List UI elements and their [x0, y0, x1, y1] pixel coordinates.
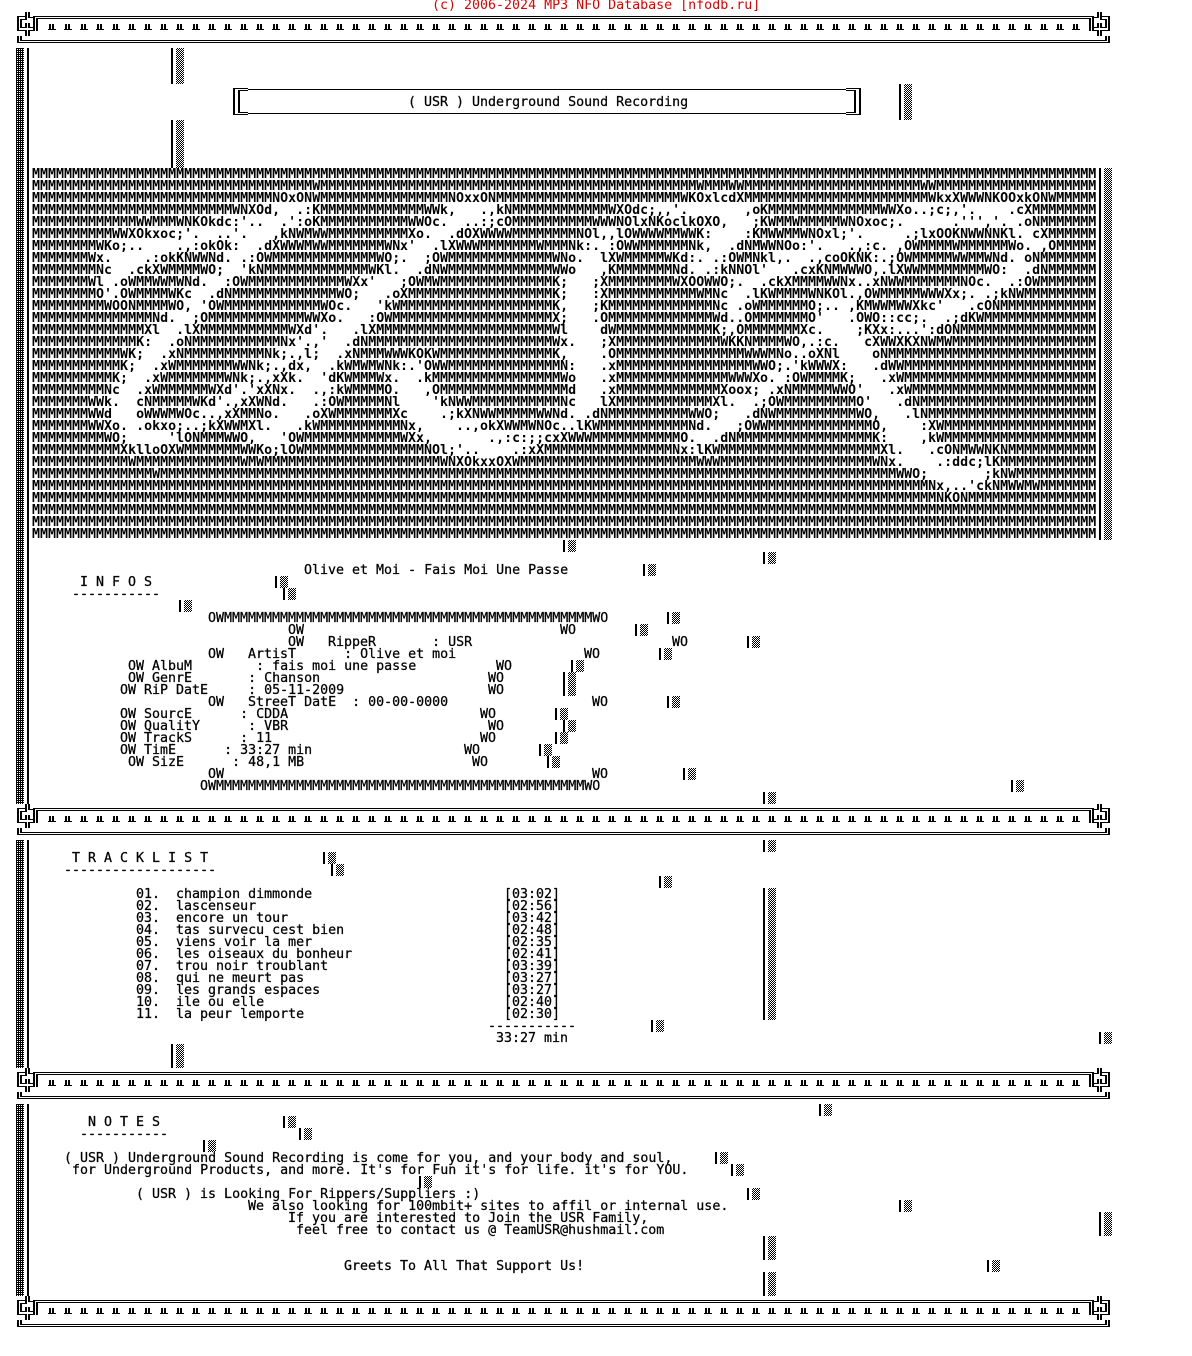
- infos panel: WO: [488, 719, 504, 734]
- infos panel: [120, 611, 688, 794]
- art column: left: MMMMMMMMMMMMMMMMMMMMMMMMMMMMMMMMMMMMMMMMMMMMMM MMMMMMMMMMMMMMMMMMMMMMMMMMMMMMMMMMMWMMMMMMMMMM MMMMMMMMMMMMMMMMMMMMMMMMMMMMMMNOxONWMMMMMMMMMM MMMMMMMMMMMMMMMMMMMMMMMMMWNXOd, .:KMMMMMMMMMM MMMMMMMMMMMMMWWMMMWNKOkdc:'.. .':oKMMMMMMMMMM MMMMMMMMMMWWXOkxoc;'. ..'. ,kNWMWWMMMMMMMMM MMMMMMMMWKo;.. .,:okOk: .dXWWWMWWMMMMMMMWN MMMMMMMWx. .:okKNWWNd. .:OWMMMMMMMMMMMMMWO; MMMMMMMMNc .ckXWMMMMWO; 'kNMMMMMMMMMMMMMWKl. MMMMMMMWl .oWMMWWMWNd. :OWMMMMMMMMMMMMWXx' MMMMMMMMO'.OWMMMMWKc .dNMMMMMMMMMMMMMWO; .o MMMMMMMMMWOONMMMMWO, 'OWMMMMMMMMMMMMWOc. 'kW MMMMMMMMMMMMMMMNd. ;OMMMMMMMMMMMMWWXo. :OWM MMMMMMMMMMMMMMXl .lXMMMMMMMMMMMWXd'. .lXMMM MMMMMMMMMMMMMK: .oNMMMMMMMMMMMNx'.,' .dNMMMM MMMMMMMMMMMWK; .xNMMMMMMMMMMNk;.,l; .xNMMMWW MMMMMMMMMMMK; .xWMMMMMMMWWNk;.,dx, .kWMWMWNk MMMMMMMMMMK; .xWMMMMMMMWNk;.,xXk. 'dKWMMMWx. MMMMMMMMMNc .xWMMMMMMWXd'.'xXNx. .,:kWMMMMO. MMMMMMMWWk. cNMMMMMWKd'.,xXWNd. .:OWMMMMMNl MMMMMMMWWd oWWWMWOc..,xXMMNo. .oXWMMMMMMMX MMMMMMMWWXo. .okxo;..;kXWWMXl. .kWMMMMMMMMMM MMMMMMMMMWO; 'lONMMMWWO, 'OWMMMMMMMMMMMM MMMMMMMMMMMXklloOXWMMMMMMMWWKo;lOWMMMMMMMMMMMM MMMMMMMMMMMMWMMMMMMMMMMMMMWMWMMMMMMMMMMMMMMMMM MMMMMMMMMMMMMMMWMMMMMMMMMMMMMMMMMMMMMMMMMMMMMM MMMMMMMMMMMMMMMMMMMMMMMMMMMMMMMMMMMMMMMMMMMMMM MMMMMMMMMMMMMMMMMMMMMMMMMMMMMMMMMMMMMMMMMMMMMM MMMMMMMMMMMMMMMMMMMMMMMMMMMMMMMMMMMMMMMMMMMMMM MMMMMMMMMMMMMMMMMMMMMMMMMMMMMMMMMMMMMMMMMMMMMM MMMMMMMMMMMMMMMMMMMMMMMMMMMMMMMMMMMMMMMMMMMMMM: [32, 167, 400, 542]
- infos panel: OWMMMMMMMMMMMMMMMMMMMMMMMMMMMMMMMMMMMMMMMMMMMMMMWO: [208, 611, 608, 626]
- track numbers and titles: 01. champion dimmonde 02. lascenseur 03. encore un tour 04. tas survecu cest bien 05. viens voir la mer 06. les oiseaux du bonheur 07. trou noir troublant 08. qui ne meurt pas 09. les grands espaces 10. ile ou elle 11. la peur lemporte: [136, 887, 352, 1022]
- info row: size: OW SizE : 48,1 MB: [128, 755, 304, 770]
- infos panel: WO: [592, 767, 608, 782]
- infos panel: WO: [480, 731, 496, 746]
- ornamental border: above tracklist: [17, 804, 1110, 835]
- shade bars: tracklist section: [171, 840, 1112, 1068]
- infos panel: WO: [592, 695, 608, 710]
- infos panel: WO: [672, 635, 688, 650]
- info row: rip date: OW RiP DatE : 05-11-2009: [120, 683, 344, 698]
- right shade bar beside the art: [1096, 168, 1112, 540]
- album heading: Olive et Moi - Fais Moi Une Passe: [304, 563, 568, 578]
- greetings line: Greets To All That Support Us!: [344, 1259, 584, 1274]
- infos panel: WO: [560, 623, 576, 638]
- top ornamental border: [17, 12, 1110, 43]
- notes underline: -----------: [80, 1127, 168, 1142]
- infos panel: WO: [480, 707, 496, 722]
- notes text block: for Underground Products, and more. It's for Fun it's for life. it's for YOU.: [72, 1163, 688, 1178]
- left edge strip: tracklist section: [16, 840, 30, 1068]
- infos panel: OWMMMMMMMMMMMMMMMMMMMMMMMMMMMMMMMMMMMMMMMMMMMMMMWO: [200, 779, 600, 794]
- ornamental border: bottom: [17, 1296, 1110, 1327]
- info row: tracks: OW TrackS : 11: [120, 731, 272, 746]
- info row: ripper: OW RippeR : USR: [288, 635, 472, 650]
- infos panel: WO: [496, 659, 512, 674]
- tracklist underline: -------------------: [64, 863, 216, 878]
- notes text block: We also looking for 100mbit+ sites to affil or internal use.: [248, 1199, 728, 1214]
- infos panel: OW: [288, 623, 304, 638]
- info row: genre: OW GenrE : Chanson: [128, 671, 320, 686]
- infos heading: I N F O S: [80, 575, 152, 590]
- total rule: -----------: [488, 1019, 576, 1034]
- title text: ( USR ) Underground Sound Recording: [408, 95, 688, 110]
- shade bars: infos section: [179, 540, 1024, 804]
- infos panel: WO: [584, 647, 600, 662]
- tracklist heading: T R A C K L I S T: [72, 851, 208, 866]
- info row: quality: OW QualitY : VBR: [120, 719, 288, 734]
- notes heading: N O T E S: [88, 1115, 160, 1130]
- ascii art panel: faces built from characters: [32, 167, 1096, 542]
- shade bars around the title: [171, 48, 912, 168]
- infos panel: WO: [488, 671, 504, 686]
- notes text block: [64, 1151, 728, 1274]
- infos underline: -----------: [72, 587, 160, 602]
- infos panel: WO: [488, 683, 504, 698]
- art column: centre: MMMMMMMMMMMMMMMMMMMMMMMMMMMMMMMMMMMMMMMMMMMMM MMMMMMMMMMMMMMMMMMMMMMMMMMMMMMMMMMMMMWMMMWWMM MMMMMMNOxxONMMMMMMMMMMMMMMMMMMMMMMMWKOxlcdXMM MMMWWk, .,kNMMMMMMMMMMMMWXOdc;,,'. ,o MWWOc. ..:;cOMMMMMMMMMMWWWNOlxNKoclkOXO, ; MXo. .dOXWWWWMMMMMMMMNOl,,lOWWWWMMWWK: :K x' .lXWWWMMMMMMMWMMMNk:. :OWWMMMMMMNk, .dNM . ;OWMMMMMMMMMMMMMWNo. lXWMMMMMWKd:. .:OWMN .dNWMMMMMMMMMMMMMWWo ,KMMMMMMMNd. .:kNNOl ;OWMWMMMMMMMMMMMMMMK; ;XMMMMMMMMWXOOWWO;. XMMMMMMMMMMMMMMMMMMK; :XMMMMMMMMMMMWMNc .l MMMMMMMMMMMMMMMMMMMK, ;KMMMMMMMMMMMMMNc .oW MMMMMMMMMMMMMMMMMMMX; .OMMMMMMMMMMMMMWd..OM MMMMMMMMMMMMMMMMMMMWl dWMMMMMMMMMMMMK;,OMM MMMMMMMMMMMMMMMMMMMWx. ;XMMMMMMMMMMMMMWKKNM WKOKWMMMMMMMMMMMMMMK, .OMMMMMMMMMMMMMMMMWW :.'OWWMMMMMMMMMMMMMMN: .xMMMMMMMMMMMMMMMMMW .kMMMMMMMMMMMMMMMMWo .xMMMMMMMMMMMMMMWWWX ,OMMMMMMMMMMMMMMMMd .xMMMMMMMMMMMMMXoox; 'kNWWMMMMMMMMMMMNc lXMMMMMMMMMMMMXl. . c .;kXNWWMMMMMWWNd. .dNMMMMMMMMMMWWO; .d Nx, ..,okXWWMWNOc..lKWMMMMMMMMMMMNd. ;OW WXx, .,:c:;;cxXWWWMMMMMMMMMMMO. .dNMMM MMMNOl;'.. .:xXMMMMMMMMMMMMMMMMNx:lKWMMMMM MMMMMWNXOkxxOXWMMMMMMMMMMMMMMMMMMMMMMWWWMMMMM MMMMMMMMMMMMMMMMMMMMMMMMMMMMMMMMMMMMMMMMMMMMM MMMMMMMMMMMMMMMMMMMMMMMMMMMMMMMMMMMMMMMMMMMMM MMMMMMMMMMMMMMMMMMMMMMMMMMMMMMMMMMMMMMMMMMMMM MMMMMMMMMMMMMMMMMMMMMMMMMMMMMMMMMMMMMMMMMMMMM MMMMMMMMMMMMMMMMMMMMMMMMMMMMMMMMMMMMMMMMMMMMM MMMMMMMMMMMMMMMMMMMMMMMMMMMMMMMMMMMMMMMMMMMMM: [400, 167, 760, 542]
- art column: right: MMMMMMMMMMMMMMMMMMMMMMMMMMMMMMMMMMMMMMMMMM MMMMMMMMMMMMMMMMMMMMWWMMMMMMMMMMMMMMMMMMMM MMMMMMMMMMMMMMMMMMMMMWkxXWWWNKOOxkONWMMMMM KMMMMMMMMMMMMMMWWXo..;c;,'. .cXMMMMMMMM KWMMWMMMMMWNOxoc;. .''','. .oNMMMMMMM MWWMMWNOxl;'. .;lxOOKNWWNNKl. cXMMMMMM WWNOo:'. .,:c. ,OWMMMMWMMMMMMWo. ,OMMMMM kl,. .,coOKNK:.;OWMMMMMWWMMWNd. oNMMMMMMM ' .cxKNMWWWO,.lXWWMMMMMMMMWO: .dNMMMMMM .ckXMMMMWWNx..xNWWMMMMMMMNOc. .:OWMMMMMMM KWMMMMWNKOl.,OWMMMMMWWWXx;. .;kNWMMMMMMMMM MMMMMMO;.. ,KMWWMWWXkc' .cONMMMMMMMMMMMM MMMMMMO' .OWO::cc;. .;dKWMMMMMMMMMMMMMM MMMMMXc. ;KXx:...':dONMMMMMMMMMMMMMMMMM MMMWO,.:c. cXWWXKXNWMWMMMMMMMMMMMMMMMMMM WMNo..oXNl oNMMMMMMMMMMMMMMMMMMMMMMMMMM WO;.'kWWWX: .dWWMMMMMMMMMMMMMMMMMMMMMMMM o. :OWMMMMK; .xWMMMMMMMMMMMMMMMMMMMMMMMM .xNMMMMMWWO' .xWMMMMMMMMMMMMMMMMMMMMMMM ;OWMMMMMMMMMO' .dNMMMMMMMMMMMMMMMMMMMMMM NWMMMMMMMMMMWO, .lNMMMMMMMMMMMMMMMMMMMMM WMMMMMMMMMMMMMO, :XWMMMMMMMMMMMMMMMMMMM MMMMMMMMMMMMMMK: ,kWMMMMMMMMMMMMMMMMMMM MMMMMMMMMMMMMMMXl. .cONMWWNKNMMMMMMMMMMM MMMMMMMMMMMMMMWNx. .:ddc;lKMMMMMMMMMMMM MMMMMMMMMMMMMMMMMWWO; ;kNWMMMMMMMMMM MMMMMMMMMMMMMMMMMMMMMNx,..'ckNMWWMWMMMMMMM MMMMMMMMMMMMMMMMMMMMMMNKONMMMMMMMMMMMMMMMM MMMMMMMMMMMMMMMMMMMMMMMMMMMMMMMMMMMMMMMMMM MMMMMMMMMMMMMMMMMMMMMMMMMMMMMMMMMMMMMMMMMM MMMMMMMMMMMMMMMMMMMMMMMMMMMMMMMMMMMMMMMMMM: [760, 167, 1096, 542]
- info row: source: OW SourcE : CDDA: [120, 707, 288, 722]
- info row: album: OW AlbuM : fais moi une passe: [128, 659, 416, 674]
- notes text block: ( USR ) Underground Sound Recording is come for you, and your body and soul,: [64, 1151, 672, 1166]
- left edge strip: notes section: [16, 1104, 30, 1296]
- infos panel: OW: [208, 767, 224, 782]
- infos panel: WO: [464, 743, 480, 758]
- info row: street date: OW StreeT DatE : 00-00-0000: [208, 695, 448, 710]
- notes text block: ( USR ) is Looking For Rippers/Suppliers :): [136, 1187, 480, 1202]
- infos panel: WO: [472, 755, 488, 770]
- info row: artist: OW ArtisT : Olive et moi: [208, 647, 456, 662]
- left edge strip: header and art section: [16, 48, 30, 804]
- ornamental border: above notes: [17, 1068, 1110, 1099]
- shade bars: notes section: [203, 1104, 1112, 1296]
- track durations: [03:02] [02:56] [03:42] [02:48] [02:35] [02:41] [03:39] [03:27] [03:27] [02:40] [02:30]: [504, 887, 560, 1022]
- notes text block: If you are interested to Join the USR Family,: [288, 1211, 648, 1226]
- total duration: 33:27 min: [496, 1031, 568, 1046]
- info row: time: OW TimE : 33:27 min: [120, 743, 312, 758]
- notes text block: feel free to contact us @ TeamUSR@hushmail.com: [296, 1223, 664, 1238]
